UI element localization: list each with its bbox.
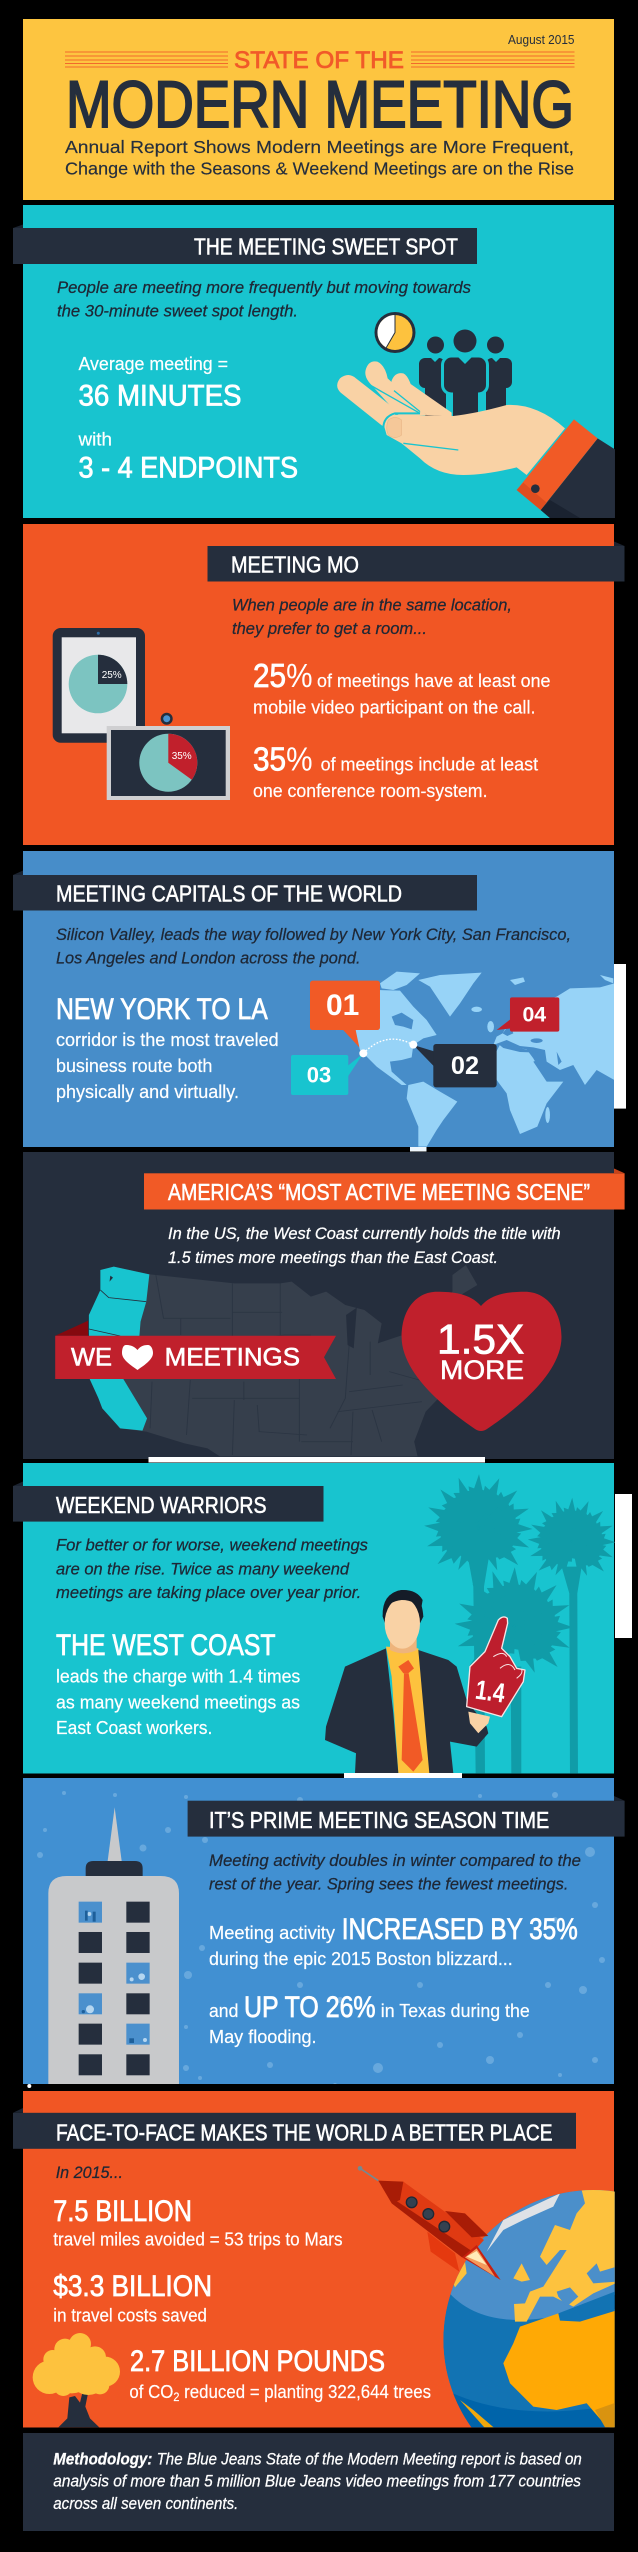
stat: 36 minutes with 3-4 endpoints: 36 MINUTES <box>78 380 242 413</box>
stat: 36 minutes with 3-4 endpoints: 3 - 4 ENDPOINTS <box>78 452 298 485</box>
pin route <box>363 1039 413 1053</box>
icon: open hand with cuff <box>337 361 615 518</box>
US map <box>89 1265 477 1458</box>
palm trees <box>423 1473 616 1773</box>
pin 02 <box>413 1044 497 1087</box>
heading ribbon: THE MEETING SWEET SPOT <box>194 233 458 259</box>
intro text: Silicon Valley, leads the way followed by New York City, San Francisco, <box>56 926 571 944</box>
icon: conference monitor with 35% pie: 35% <box>172 751 192 762</box>
stat: 2.7 billion pounds: reduced = planting 322,644 trees <box>180 2381 431 2402</box>
illustration: businessman with foam finger <box>325 1590 525 1773</box>
intro text: When people are in the same location, <box>232 596 512 614</box>
callout: new york to la: physically and virtually. <box>56 1081 239 1102</box>
heading ribbon <box>188 1796 625 1837</box>
stat: 3.3 billion <box>53 2270 212 2326</box>
stat: boston blizzard <box>209 1913 578 1969</box>
stat: 2.7 billion pounds: of CO <box>129 2381 178 2402</box>
stat: 36 minutes with 3-4 endpoints: with <box>77 429 112 450</box>
intro text: are on the rise. Twice as many weekend <box>56 1560 350 1578</box>
subtitle <box>65 137 574 178</box>
intro text: For better or for worse, weekend meetings <box>56 1537 368 1555</box>
stat: texas flooding: in Texas during the <box>381 2000 530 2021</box>
stat: boston blizzard: Meeting activity <box>209 1922 336 1943</box>
stat: boston blizzard: during the epic 2015 Boston blizzard... <box>209 1948 513 1969</box>
pin 01 <box>310 981 380 1047</box>
heading ribbon: MEETING CAPITALS OF THE WORLD <box>56 881 402 907</box>
subtitle: Annual Report Shows Modern Meetings are More Frequent, <box>65 137 574 157</box>
icon: conference monitor with 35% pie <box>107 713 230 800</box>
intro text: the 30-minute sweet spot length. <box>57 303 298 321</box>
panel: methodology: across all seven continents. <box>53 2495 238 2513</box>
stat: 25 percent: 25% <box>253 657 312 694</box>
stat: texas flooding: and <box>209 2000 238 2021</box>
panel: methodology <box>23 2433 614 2531</box>
stat: 36 minutes with 3-4 endpoints: Average meeting = <box>78 353 228 374</box>
stat: 25 percent: mobile video participant on the call. <box>253 697 536 718</box>
callout: 1.5x more heart: MORE <box>440 1355 524 1385</box>
stat: texas flooding: May flooding. <box>209 2026 317 2047</box>
intro text: 1.5 times more meetings than the East Coast. <box>168 1249 498 1267</box>
foam finger: 1.4 <box>474 1674 508 1709</box>
stat: 25 percent: of meetings have at least one <box>317 670 550 691</box>
icon: office building <box>48 1807 179 2084</box>
callout: the west coast <box>56 1629 300 1738</box>
stat: 35 percent: 35% <box>253 740 312 777</box>
stat: 35 percent: of meetings include at least <box>321 754 538 775</box>
heading ribbon: IT’S PRIME MEETING SEASON TIME <box>209 1807 549 1833</box>
intro text <box>232 596 512 638</box>
callout: the west coast: East Coast workers. <box>56 1717 212 1738</box>
panel: meeting mo <box>23 524 625 845</box>
pin 02: 02 <box>451 1052 479 1080</box>
stat: 3.3 billion: $3.3 BILLION <box>53 2270 212 2303</box>
stat: 7.5 billion: 7.5 BILLION <box>53 2195 192 2228</box>
callout: new york to la: business route both <box>56 1055 212 1076</box>
intro text <box>209 1852 581 1893</box>
intro text: In 2015... <box>56 2164 123 2182</box>
heading ribbon <box>13 870 477 910</box>
panel: weekend warriors <box>13 1463 616 1774</box>
callout: the west coast: as many weekend meetings as <box>56 1692 300 1712</box>
panel: face-to-face makes the world a better place <box>13 2091 615 2428</box>
stat: 2.7 billion pounds: 2.7 BILLION POUNDS <box>130 2345 385 2378</box>
ribbon: we love meetings: MEETINGS <box>165 1344 300 1372</box>
intro text <box>56 1537 368 1602</box>
pin 03: 03 <box>307 1062 331 1087</box>
icon: team of three people <box>419 330 512 417</box>
heading ribbon <box>13 224 477 264</box>
date: August 2015 <box>508 33 575 47</box>
intro text: meetings are taking place over year prior. <box>56 1584 361 1602</box>
stat: 35 percent <box>253 740 538 801</box>
pin 03 <box>291 1053 363 1095</box>
callout: new york to la: corridor is the most traveled <box>56 1029 279 1050</box>
panel: prime meeting season <box>23 1778 625 2087</box>
heading ribbon <box>208 542 625 582</box>
stat: texas flooding: UP TO 26% <box>244 1991 376 2024</box>
intro text: People are meeting more frequently but moving towards <box>57 279 471 297</box>
stat: 3.3 billion: in travel costs saved <box>53 2305 207 2326</box>
intro text: In the US, the West Coast currently holds the title with <box>168 1225 561 1243</box>
callout: 1.5x more heart <box>402 1292 562 1431</box>
pin 04 <box>497 997 559 1032</box>
ribbon: we love meetings: WE <box>71 1344 112 1372</box>
callout: new york to la <box>56 993 279 1102</box>
intro text <box>57 279 471 321</box>
icon: white heart <box>122 1345 153 1370</box>
panel: methodology: Methodology: The Blue Jeans State of the Modern Meeting report is based on <box>53 2450 582 2468</box>
heading ribbon: FACE-TO-FACE MAKES THE WORLD A BETTER PLACE <box>56 2119 552 2145</box>
heading ribbon: WEEKEND WARRIORS <box>56 1492 266 1518</box>
stat: 36 minutes with 3-4 endpoints <box>77 353 298 485</box>
pin 01: 01 <box>326 989 359 1022</box>
intro text <box>168 1225 561 1267</box>
callout: new york to la: NEW YORK TO LA <box>56 993 268 1026</box>
stat: 35 percent: one conference room-system. <box>253 780 488 801</box>
stat: boston blizzard: INCREASED BY 35% <box>342 1913 578 1946</box>
stat: 2.7 billion pounds: 2 <box>173 2390 180 2404</box>
map water details <box>390 1013 562 1081</box>
intro text: Los Angeles and London across the pond. <box>56 950 360 968</box>
heading ribbon: MEETING MO <box>231 552 359 578</box>
falling snow <box>37 1791 612 2087</box>
intro text <box>56 926 571 968</box>
heading ribbon <box>13 1482 324 1522</box>
subtitle: Change with the Seasons & Weekend Meetings are on the Rise <box>65 158 574 178</box>
illustration: rocket <box>358 2166 501 2280</box>
callout: 1.5x more heart: 1.5X <box>437 1315 524 1362</box>
panel: america's most active meeting scene <box>23 1152 625 1459</box>
panel: meeting capitals of the world <box>13 851 614 1147</box>
icon: tablet with 25% pie <box>53 628 145 743</box>
icon: tablet with 25% pie: 25% <box>102 670 122 681</box>
title line: state of the: STATE OF THE <box>234 47 404 74</box>
pin 04: 04 <box>522 1003 546 1027</box>
intro text: rest of the year. Spring sees the fewest meetings. <box>209 1875 568 1893</box>
stat: 25 percent <box>253 657 550 718</box>
intro text: they prefer to get a room... <box>232 620 427 638</box>
icon: clock <box>374 312 416 353</box>
foam finger <box>467 1617 525 1717</box>
stat: texas flooding <box>209 1991 530 2047</box>
callout: the west coast: leads the charge with 1.4 times <box>56 1665 300 1686</box>
callout: the west coast: THE WEST COAST <box>56 1629 276 1662</box>
panel: header <box>23 19 614 200</box>
illustration: globe <box>358 2166 615 2428</box>
panel: methodology: analysis of more than 5 million Blue Jeans video meetings from 177 countries <box>53 2472 581 2490</box>
stat: 7.5 billion <box>53 2195 343 2249</box>
stat: 7.5 billion: travel miles avoided = 53 trips to Mars <box>53 2228 343 2249</box>
heading ribbon <box>13 2108 576 2149</box>
title line: state of the <box>65 47 574 74</box>
heading ribbon <box>144 1168 625 1210</box>
intro text: Meeting activity doubles in winter compared to the <box>209 1852 581 1870</box>
ribbon: we love meetings <box>55 1321 336 1379</box>
icon: tree <box>33 2333 120 2427</box>
world map with numbered pins <box>291 972 614 1147</box>
panel: the meeting sweet spot <box>13 205 615 518</box>
map land <box>355 972 614 1147</box>
stat: 2.7 billion pounds <box>129 2345 431 2404</box>
